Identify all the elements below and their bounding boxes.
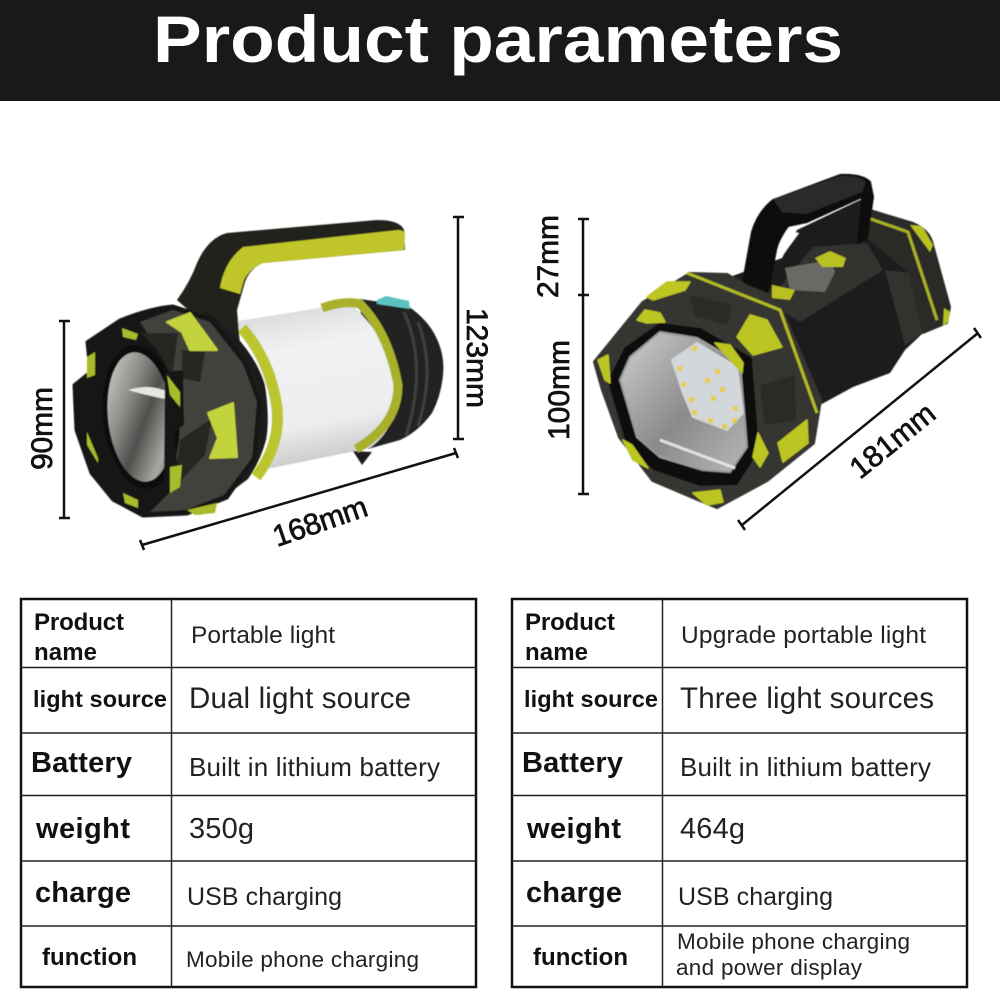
rear cap <box>360 299 443 449</box>
dimension: 181mm <box>738 328 981 530</box>
rear ring <box>867 210 950 333</box>
lens <box>620 332 747 472</box>
row: function: and power display <box>676 955 863 980</box>
head collar <box>160 310 268 515</box>
row: charge <box>526 877 833 911</box>
row: weight: weight <box>35 813 130 845</box>
row: light source <box>33 682 411 715</box>
row: weight: 350g <box>189 813 254 845</box>
dimension: 100mm: 100mm <box>543 340 576 440</box>
row: function: function <box>42 944 137 971</box>
row: charge: charge <box>35 877 131 909</box>
row: battery <box>522 747 931 782</box>
row: product name <box>34 609 335 666</box>
row: light source <box>524 682 934 715</box>
row: charge <box>35 877 342 911</box>
row: light source: light source <box>524 686 658 712</box>
reflector <box>96 341 186 493</box>
row: function: Mobile phone charging <box>186 947 419 972</box>
row: charge: USB charging <box>187 883 342 911</box>
row: function <box>42 944 419 972</box>
row: function: Mobile phone charging <box>677 929 910 954</box>
row: product name: Product <box>34 609 124 636</box>
row: charge: charge <box>526 877 622 909</box>
table: portable light <box>21 599 476 987</box>
row: battery: Battery <box>522 747 623 779</box>
dimension: 27mm <box>532 215 589 298</box>
body side panel <box>885 270 923 345</box>
yellow pads <box>598 282 808 505</box>
body mass <box>727 200 950 405</box>
row: function: function <box>533 944 628 971</box>
diffuser cylinder <box>232 303 400 470</box>
dimension: 168mm: 168mm <box>269 491 372 554</box>
row: function <box>533 929 910 980</box>
row: product name: Upgrade portable light <box>681 622 926 649</box>
head <box>595 274 820 507</box>
handle <box>177 220 405 345</box>
title banner: Product parameters <box>153 2 843 76</box>
row: battery: Built in lithium battery <box>189 752 440 782</box>
row: light source: Dual light source <box>189 682 411 715</box>
dimension: 27mm: 27mm <box>532 215 565 298</box>
row: charge: USB charging <box>678 883 833 911</box>
dimension: 90mm: 90mm <box>26 387 59 470</box>
handle gap highlight <box>780 232 799 252</box>
head outer <box>74 306 260 516</box>
lens frame <box>610 325 757 484</box>
row: product name: Portable light <box>191 622 335 649</box>
illustration: portable light side view <box>74 220 443 516</box>
row: weight <box>35 813 254 845</box>
LEDs <box>677 346 738 429</box>
dimension: 123mm <box>453 217 493 439</box>
row: light source: Three light sources <box>680 682 934 715</box>
dimension: 90mm <box>26 321 70 518</box>
row: product name: name <box>34 639 97 666</box>
row: product name: name <box>525 639 588 666</box>
top display and buttons <box>785 260 835 292</box>
table: upgrade portable light <box>512 599 967 987</box>
row: weight <box>526 813 745 845</box>
lime arrows and pads <box>167 313 217 350</box>
row: battery <box>31 747 440 782</box>
title banner <box>0 0 1000 101</box>
illustration: upgrade portable light <box>595 175 950 507</box>
dimension: 168mm <box>140 448 458 554</box>
carry handle <box>743 175 873 292</box>
row: light source: light source <box>33 686 167 712</box>
row: product name: Product <box>525 609 615 636</box>
row: weight: 464g <box>680 813 745 845</box>
body top <box>727 243 883 322</box>
dimension: 181mm: 181mm <box>844 397 942 485</box>
yellow rings <box>322 303 398 449</box>
row: battery: Battery <box>31 747 132 779</box>
dimension: 100mm <box>543 295 589 494</box>
row: product name <box>525 609 926 666</box>
row: battery: Built in lithium battery <box>680 752 931 782</box>
row: weight: weight <box>526 813 621 845</box>
dimension: 123mm: 123mm <box>460 308 493 408</box>
